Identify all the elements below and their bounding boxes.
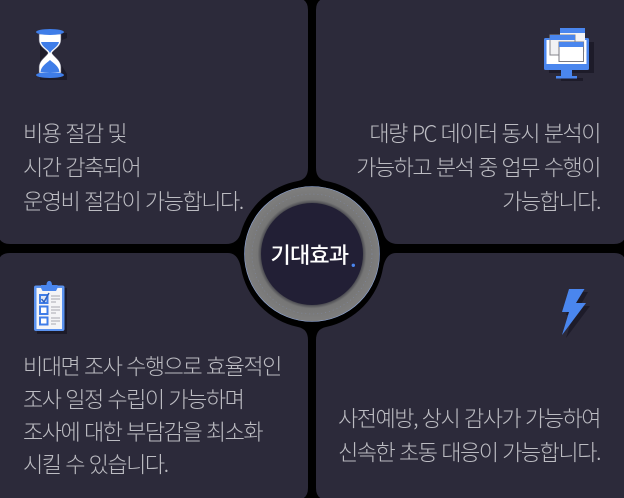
- title accent dot: [352, 264, 355, 267]
- text: preventive monitoring description: 신속한 초동 대응이 가능합니다.: [338, 436, 600, 468]
- title: 기대효과: [270, 238, 349, 270]
- panel: preventive monitoring: [316, 253, 624, 498]
- text: contactless survey description: 시킬 수 있습니다.: [23, 448, 168, 480]
- panel: contactless survey: [0, 253, 308, 498]
- panel background: [0, 253, 308, 498]
- panel background: [316, 0, 624, 244]
- dotted ring detail: [252, 194, 372, 314]
- outer ring: [244, 186, 380, 322]
- icon: lightning bolt: [562, 289, 590, 338]
- text: contactless survey description: 비대면 조사 수행으로 효율적인: [23, 350, 281, 382]
- text: bulk PC data description: 대량 PC 데이터 동시 분석이: [369, 116, 600, 148]
- text: bulk PC data description: 가능하고 분석 중 업무 수행이: [356, 150, 600, 182]
- text: bulk PC data description: 가능합니다.: [502, 184, 600, 216]
- panel: bulk PC data analysis: [316, 0, 624, 244]
- center badge: [244, 186, 380, 322]
- inner disc: [261, 203, 363, 305]
- text: cost saving description: 운영비 절감이 가능합니다.: [23, 184, 243, 216]
- icon: monitor with windows: [544, 28, 594, 81]
- panel background: [316, 253, 624, 498]
- text: contactless survey description: 조사에 대한 부담감을 최소화: [23, 415, 263, 447]
- text: contactless survey description: 조사 일정 수립이 가능하며: [23, 382, 243, 414]
- text: preventive monitoring description: 사전예방, 상시 감사가 가능하여: [338, 402, 600, 434]
- icon: clipboard checklist: [34, 281, 67, 334]
- text: cost saving description: 비용 절감 및: [23, 116, 126, 148]
- panel background: [0, 0, 308, 244]
- text: cost saving description: 시간 감축되어: [23, 150, 140, 182]
- icon: hourglass: [36, 29, 67, 80]
- panel: cost saving: [0, 0, 308, 244]
